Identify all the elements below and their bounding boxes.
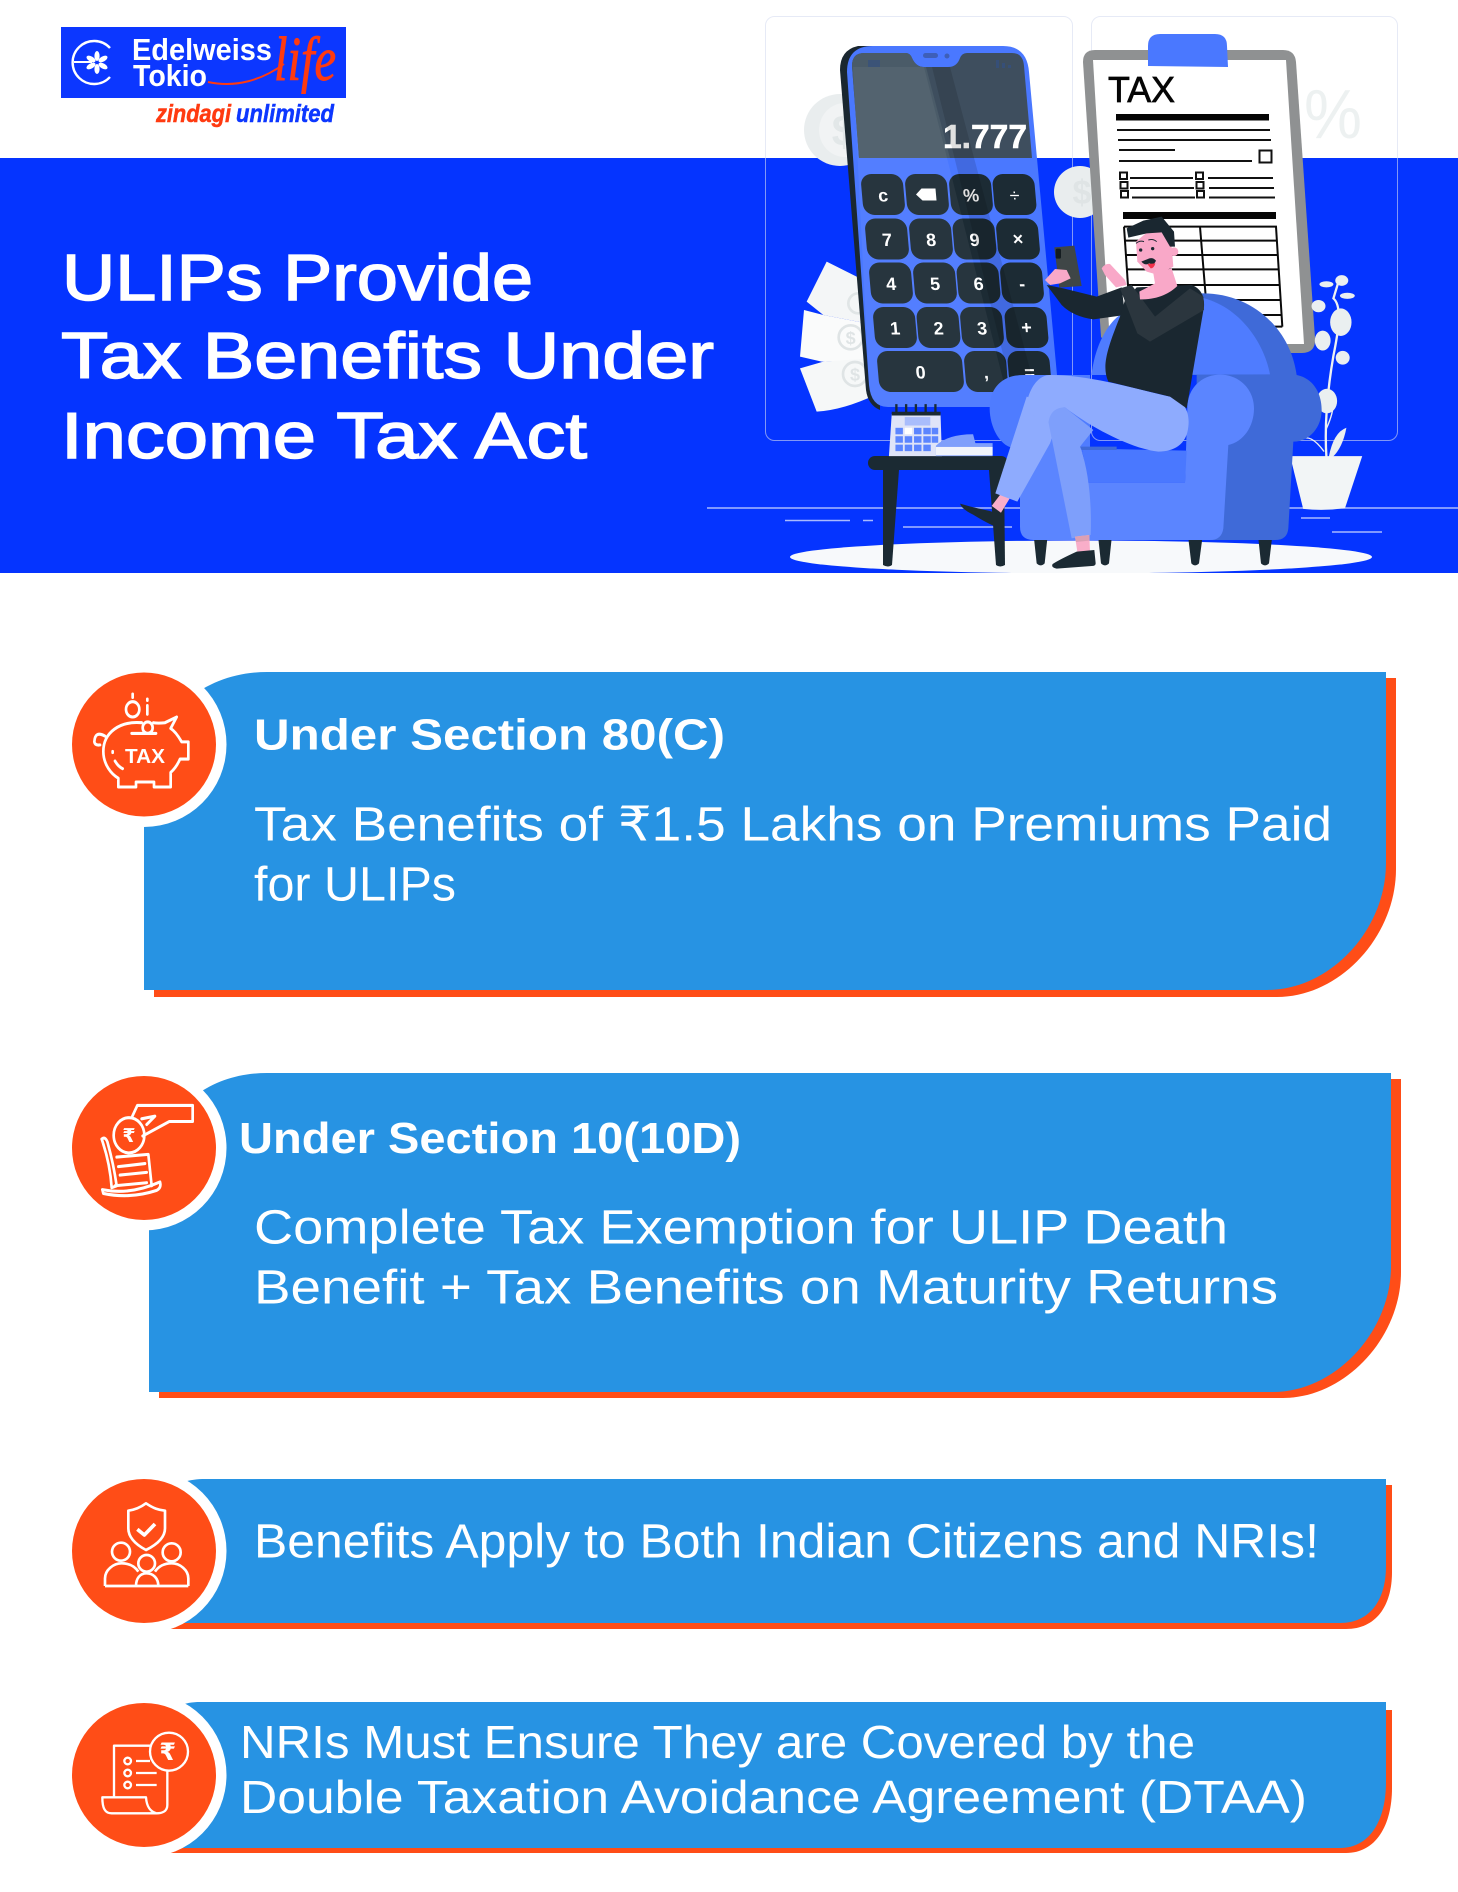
text block: Tax Benefits of ₹1.5 Lakhs on Premiums Paid [254, 798, 1332, 852]
text block: Complete Tax Exemption for ULIP Death [254, 1202, 1228, 1254]
icon: coin and rocking chair [62, 1066, 226, 1230]
icon: percent sign: % [1304, 75, 1362, 153]
calculator keys: % [962, 186, 980, 205]
back foot and shoe [960, 494, 1010, 530]
logo: life [274, 26, 336, 94]
man: torso, arms, head and phone [1045, 217, 1204, 408]
logo: unlimited [236, 100, 335, 128]
icon: banknotes: $ [846, 328, 856, 348]
text block: Benefits Apply to Both Indian Citizens and NRIs! [254, 1516, 1319, 1568]
icon: coin and rocking chair: ₹ [122, 1126, 136, 1147]
calculator keys: = [1023, 363, 1036, 382]
phone calculator [840, 46, 1057, 410]
icon: banknotes: $ [850, 365, 860, 385]
heading: Under Section 10(10D) [239, 1114, 741, 1163]
panel: section 10(10D) [62, 1066, 1401, 1398]
icon: banknotes [800, 262, 875, 412]
calculator keys: , [983, 363, 989, 382]
calculator keys: 3 [976, 319, 988, 338]
panel: both Indian citizens and NRIs [62, 1468, 1392, 1634]
calculator keys: ÷ [1009, 186, 1021, 205]
tax form clipboard: TAX [1108, 69, 1175, 110]
panel: section 10(10D): Benefit + Tax Benefits on Maturity Returns [254, 1262, 1278, 1314]
title: ULIPs Provide [62, 241, 533, 314]
man: legs, foot and shoes [960, 375, 1189, 569]
calculator keys: 6 [973, 274, 984, 294]
logo: Tokio [133, 58, 207, 93]
calculator keys: 8 [925, 230, 937, 250]
logo [61, 26, 346, 128]
calculator keys: 4 [885, 274, 897, 294]
title [61, 241, 714, 472]
floor ellipse [790, 540, 1372, 574]
blue header band [0, 158, 1458, 573]
icon: piggy bank: TAX [125, 746, 166, 768]
icon: piggy bank [62, 662, 226, 827]
panel: section 80(C) [62, 662, 1396, 997]
tax form clipboard [1083, 34, 1315, 353]
phone calculator: 1.777 [943, 118, 1027, 155]
calculator keys: 1 [889, 319, 901, 338]
panel: section 80(C): for ULIPs [254, 858, 456, 912]
title: Tax Benefits Under [61, 319, 714, 392]
calculator keys: 0 [915, 363, 926, 382]
icon: bill with rupee: ₹ [159, 1739, 176, 1766]
illustration: background panels and floor lines [707, 16, 1458, 532]
plant in pot [1290, 275, 1362, 510]
side table [868, 456, 1008, 566]
calculator keys: 5 [929, 274, 941, 294]
calculator keys: 2 [933, 319, 944, 338]
calculator keys [860, 174, 1052, 392]
calculator keys: + [1020, 318, 1033, 337]
icon: coins: $ [832, 107, 856, 156]
logo: zindagi [155, 100, 232, 128]
calendar and book [889, 404, 993, 456]
panel: DTAA [62, 1692, 1392, 1858]
calculator keys: c [877, 186, 889, 205]
text block: NRIs Must Ensure They are Covered by the [240, 1716, 1195, 1768]
calculator keys: 7 [881, 230, 893, 250]
icon: shield and people [62, 1468, 226, 1634]
panel: DTAA: Double Taxation Avoidance Agreement (DTAA) [240, 1771, 1307, 1823]
calculator keys: 9 [969, 230, 980, 250]
icon: coins: $ [1073, 174, 1092, 212]
icon: bill with rupee [62, 1692, 226, 1858]
icon: coins [804, 94, 1106, 218]
armchair [990, 293, 1322, 565]
calculator keys: × [1012, 229, 1024, 249]
calculator keys: - [1018, 274, 1026, 294]
title: Income Tax Act [61, 399, 587, 472]
heading: Under Section 80(C) [254, 710, 725, 760]
logo: Edelweiss [132, 32, 272, 67]
